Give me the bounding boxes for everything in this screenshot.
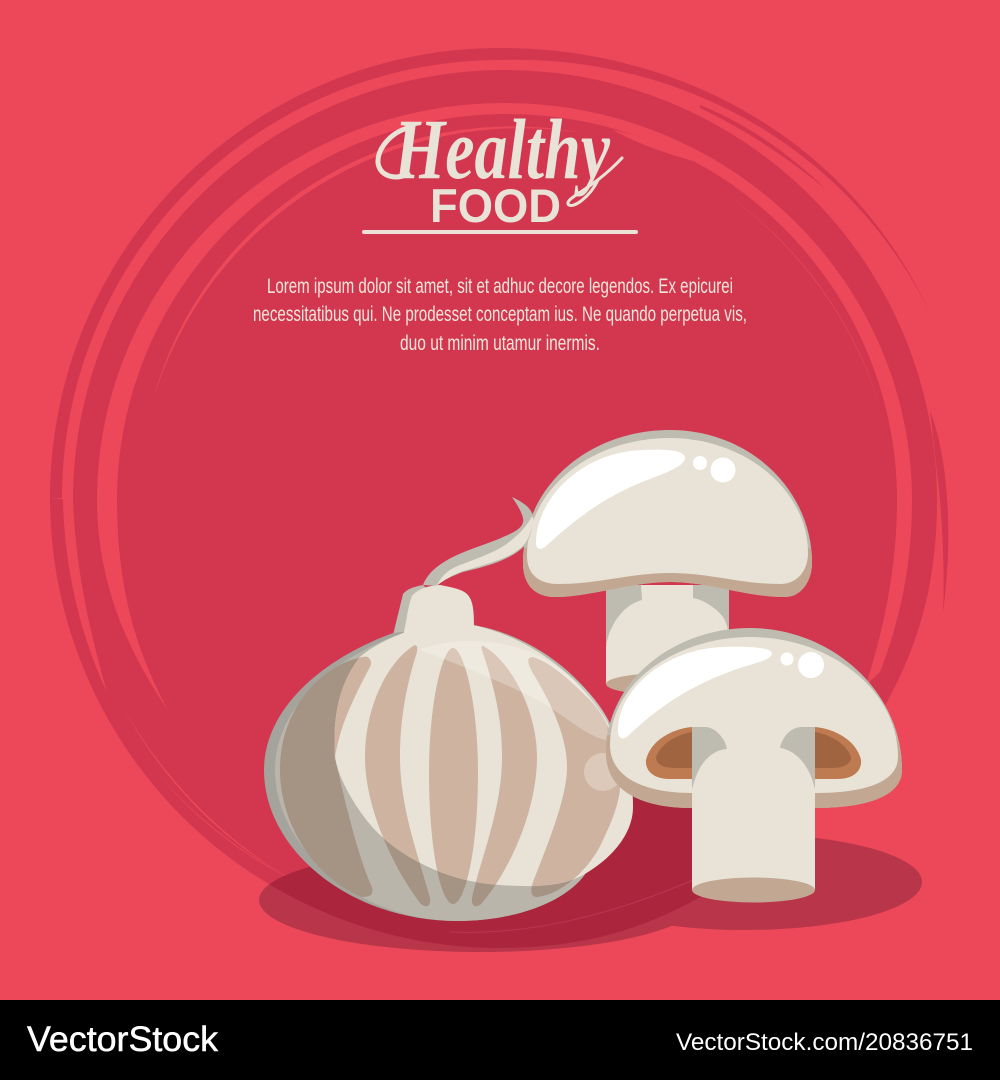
onion — [264, 497, 633, 921]
front cap highlight — [618, 647, 772, 738]
gills — [646, 727, 692, 779]
body text: duo ut minim utamur inermis. — [400, 332, 600, 355]
cap highlight — [536, 450, 685, 549]
footer url: VectorStock.com/20836751 — [676, 1029, 973, 1056]
onion lit area — [334, 625, 633, 886]
body text: Lorem ipsum dolor sit amet, sit et adhuc decore legendos. Ex epicurei — [267, 275, 733, 298]
back mushroom cap — [523, 430, 812, 597]
back mushroom — [523, 430, 812, 695]
onion dark segments — [280, 645, 620, 906]
body text — [253, 275, 747, 355]
onion highlight — [420, 641, 608, 740]
title: FOOD: FOOD — [430, 179, 561, 232]
onion neck — [403, 585, 474, 638]
front mushroom — [606, 628, 902, 902]
title: Healthy: Healthy — [393, 101, 611, 197]
gill collars — [692, 727, 727, 790]
onion body — [264, 625, 633, 921]
front mushroom cap — [606, 628, 902, 808]
back mushroom stem — [606, 585, 729, 695]
body text: necessitatibus qui. Ne prodesset conceptam ius. Ne quando perpetua vis, — [253, 303, 747, 326]
onion neck shade — [393, 585, 440, 640]
brush circle — [50, 48, 948, 948]
footer logo: VectorStock — [27, 1020, 219, 1059]
title flourish — [378, 128, 622, 205]
front mushroom stem — [692, 748, 815, 890]
footer bar — [0, 1000, 1000, 1080]
ground shadows — [259, 796, 922, 952]
title underline — [362, 230, 638, 234]
onion stalk — [423, 497, 533, 586]
onion lit segments — [334, 645, 620, 886]
